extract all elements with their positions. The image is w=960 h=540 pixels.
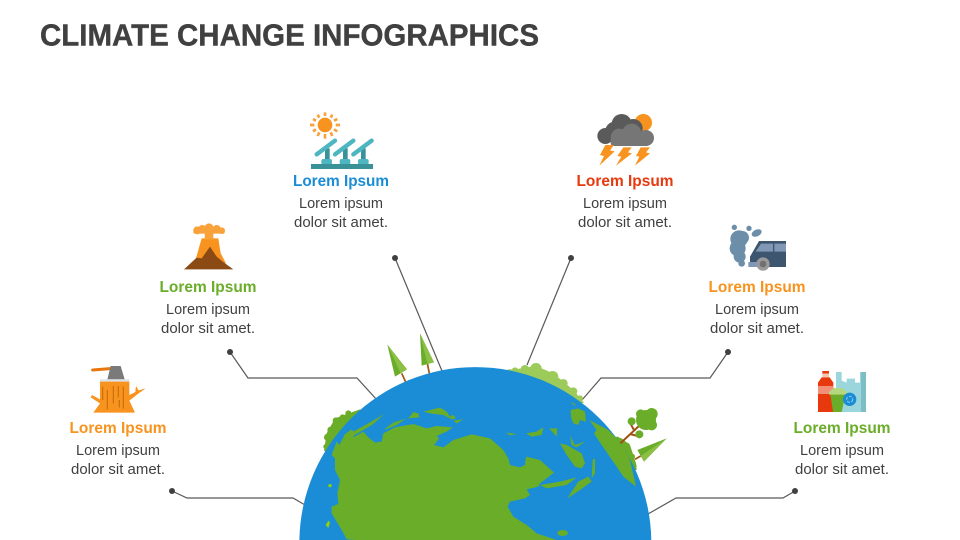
- connector: top left: [392, 255, 442, 371]
- item: solar (top left): [293, 112, 389, 231]
- text block: Lorem ipsum: [76, 442, 160, 459]
- heading: Lorem Ipsum: [708, 279, 806, 296]
- item: solar (top left): dolor sit amet.: [294, 214, 388, 231]
- text block: Lorem ipsum: [166, 301, 250, 318]
- connector: lower right: [648, 488, 798, 514]
- heading: Lorem Ipsum: [576, 173, 674, 190]
- heading: Lorem Ipsum: [293, 173, 389, 190]
- bush: top right: [507, 363, 584, 417]
- tree: right leafy: [620, 408, 658, 443]
- item: vehicle pollution (middle right): [708, 225, 806, 337]
- icon: tree stump with axe: [91, 366, 146, 413]
- bush: left: [323, 409, 380, 463]
- item: storm (top right): dolor sit amet.: [578, 214, 672, 231]
- icon: volcano: [184, 223, 233, 269]
- item: deforestation (lower left): [70, 366, 166, 478]
- tree: left pine: [387, 345, 407, 382]
- continents: [326, 402, 636, 540]
- heading: Lorem Ipsum: [70, 420, 166, 437]
- connector: middle left: [227, 349, 377, 400]
- text block: Lorem ipsum: [299, 195, 383, 212]
- heading: Lorem Ipsum: [794, 420, 890, 437]
- globe ocean: [299, 367, 651, 540]
- text block: Lorem ipsum: [583, 195, 667, 212]
- icon: bottle, cup and bag: [818, 371, 866, 412]
- connector: middle right: [582, 349, 731, 400]
- tree: right pine: [635, 438, 667, 462]
- item: plastic waste (lower right): [794, 371, 890, 478]
- item: vehicle pollution (middle right): dolor sit amet.: [710, 320, 804, 337]
- icon: car with exhaust: [730, 225, 786, 271]
- item: deforestation (lower left): dolor sit amet.: [71, 461, 165, 478]
- bush: right: [613, 437, 637, 470]
- item: storm (top right): [576, 114, 674, 231]
- tree: centre pine: [420, 333, 434, 373]
- icon: storm cloud: [597, 114, 654, 166]
- item: volcano (middle left): dolor sit amet.: [161, 320, 255, 337]
- connector: top right: [527, 255, 574, 365]
- connector: lower left: [169, 488, 305, 505]
- globe illustration: [299, 333, 667, 540]
- title: CLIMATE CHANGE INFOGRAPHICS: [40, 18, 539, 52]
- heading: Lorem Ipsum: [160, 279, 256, 296]
- icon: sun and solar panels: [310, 112, 373, 169]
- item: plastic waste (lower right): dolor sit amet.: [795, 461, 889, 478]
- item: volcano (middle left): [160, 223, 256, 337]
- text block: Lorem ipsum: [715, 301, 799, 318]
- text block: Lorem ipsum: [800, 442, 884, 459]
